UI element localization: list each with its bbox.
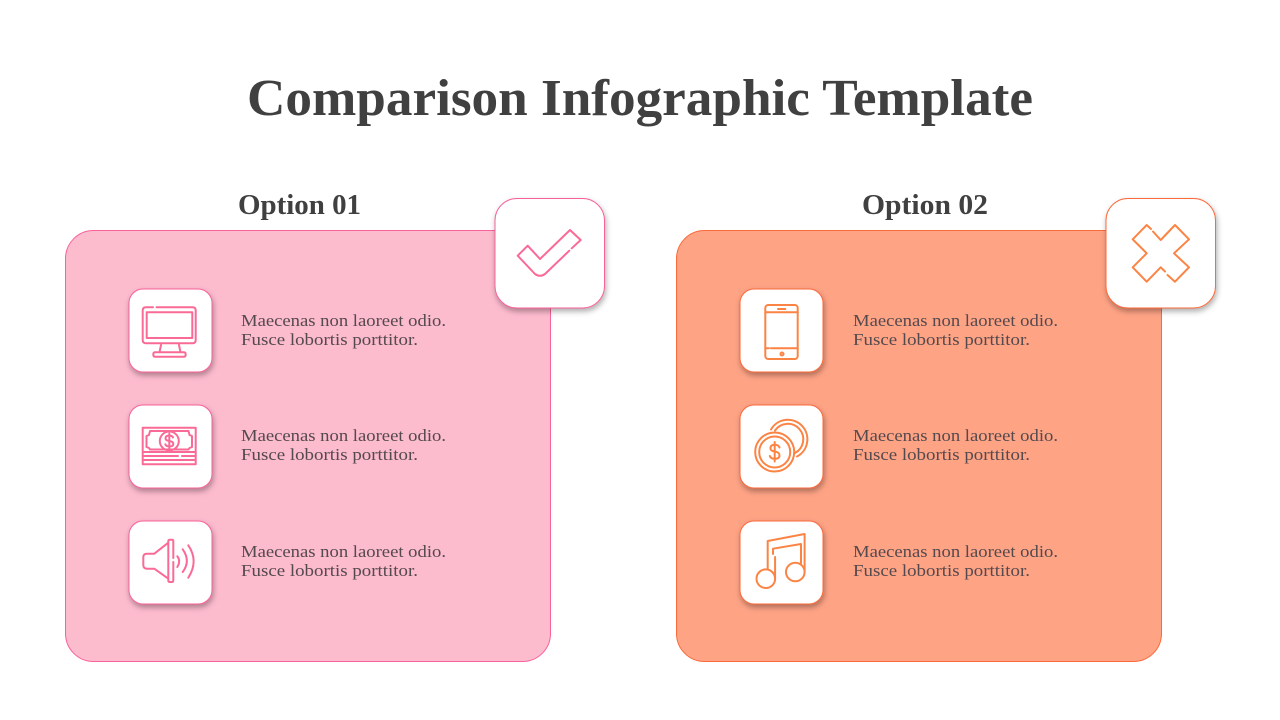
row 2 text (241, 426, 446, 464)
row 2 text: Fusce lobortis porttitor. (241, 445, 418, 464)
row 2 text: Maecenas non laoreet odio. (241, 426, 446, 445)
row 3 text: Maecenas non laoreet odio. (241, 542, 446, 561)
panel background: option 02 (676, 230, 1162, 662)
title: Comparison Infographic Template (247, 70, 1033, 127)
panel: option 02 (676, 189, 1216, 662)
row 3 text: Maecenas non laoreet odio. (853, 542, 1058, 561)
row 3 text: Fusce lobortis porttitor. (241, 561, 418, 580)
panel: option 01 (66, 189, 604, 662)
row 3 icon card: speaker (129, 521, 212, 604)
row 1 text: Fusce lobortis porttitor. (241, 330, 418, 349)
heading: option 02: Option 02 (862, 189, 988, 221)
badge: cross mark (1106, 198, 1216, 308)
row 1 icon card: monitor (129, 289, 212, 372)
row 3 text (853, 542, 1058, 580)
row 1 text: Maecenas non laoreet odio. (853, 311, 1058, 330)
row 1 icon card: phone (740, 289, 823, 372)
row 1 text (241, 311, 446, 349)
heading: option 01: Option 01 (238, 189, 361, 221)
row 2 text: Fusce lobortis porttitor. (853, 445, 1030, 464)
row 3 icon card: music notes (740, 521, 823, 604)
row 1 text: Maecenas non laoreet odio. (241, 311, 446, 330)
row 2 icon card: coins (740, 405, 823, 488)
row 2 icon card: banknotes (129, 405, 212, 488)
row 1 text: Fusce lobortis porttitor. (853, 330, 1030, 349)
row 2 text: Maecenas non laoreet odio. (853, 426, 1058, 445)
row 2 text (853, 426, 1058, 464)
row 3 text: Fusce lobortis porttitor. (853, 561, 1030, 580)
row 1 text (853, 311, 1058, 349)
row 3 text (241, 542, 446, 580)
badge: check mark (495, 198, 604, 308)
panel background: option 01 (66, 230, 550, 662)
